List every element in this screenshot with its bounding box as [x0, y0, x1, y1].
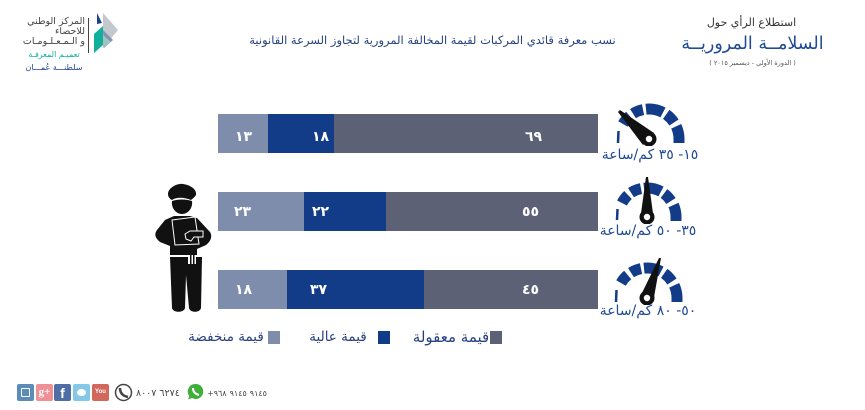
logo: و الـمـعـلـومـات: [23, 36, 85, 47]
logo: سلطنـــة عُمـــان: [26, 63, 82, 72]
segment low 23: ٢٣: [234, 204, 251, 220]
phone number: ٦٢٧٤: [159, 388, 180, 399]
segment high 37: ٣٧: [310, 282, 327, 298]
segment low 18: ١٨: [235, 282, 252, 298]
icon: youtube: [92, 384, 109, 401]
whatsapp number: ٩١٤٥: [230, 389, 247, 398]
subtitle: نسب معرفة قائدي المركبات لقيمة المخالفة المرورية لتجاوز السرعة القانونية: [249, 33, 616, 47]
segment reasonable 55: [386, 192, 598, 231]
icon: facebook: [54, 384, 71, 401]
whatsapp number: [207, 389, 267, 398]
legend swatch: reasonable: [490, 331, 502, 344]
segment low 23: [218, 192, 304, 231]
phone number: ٨٠٠٧: [136, 388, 156, 399]
legend text: low: قيمة منخفضة: [188, 329, 264, 345]
logo: [23, 13, 118, 72]
legend text: reasonable: قيمة معقولة: [413, 328, 489, 346]
title block: [681, 15, 824, 67]
legend swatch: high: [378, 331, 390, 344]
segment low 13: [218, 114, 268, 153]
phone number: [136, 388, 180, 399]
whatsapp number: ٩١٤٥: [250, 389, 267, 398]
whatsapp number: +٩٦٨: [207, 389, 227, 398]
social bar: [17, 384, 267, 402]
segment high 22: [304, 192, 386, 231]
segment reasonable 45: [424, 270, 598, 309]
segment reasonable 69: ٦٩: [525, 129, 542, 145]
legend text: high: قيمة عالية: [309, 329, 367, 345]
gauge 1: [616, 104, 684, 146]
segment high 18: ١٨: [312, 129, 329, 145]
segment reasonable 45: ٤٥: [522, 282, 539, 298]
logo: تعميـم المعرفـة: [28, 50, 80, 59]
bar row 1: [218, 114, 598, 153]
icon: phone: [114, 384, 132, 402]
gauge 2 label: ٣٥- ٥٠ كم/ساعة: [600, 223, 696, 239]
segment reasonable 69: [334, 114, 598, 153]
segment reasonable 55: ٥٥: [522, 204, 539, 220]
legend swatch: low: [268, 331, 280, 344]
icon: google plus: g+: [39, 386, 50, 398]
segment high 37: [287, 270, 424, 309]
heading: traffic safety: السلامــة المروريــة: [681, 34, 824, 54]
logo: للاحصاء: [55, 26, 85, 37]
segment high 22: ٢٢: [312, 204, 329, 220]
icon: facebook: f: [60, 385, 65, 401]
logo: المركز الوطني: [27, 16, 85, 27]
icon: twitter: [73, 384, 90, 401]
gauge 3 label: ٥٠- ٨٠ كم/ساعة: [600, 303, 696, 319]
bar row 3: [218, 270, 598, 309]
gauge 3: [614, 258, 682, 305]
icon: whatsapp: [188, 384, 204, 400]
edition note: ( الدورة الأولى - ديسمبر ٢٠١٥ ): [709, 59, 796, 67]
icon: youtube: You: [95, 389, 106, 395]
gauge 1 label: ١٥- ٣٥ كم/ساعة: [602, 147, 698, 163]
segment low 18: [218, 270, 287, 309]
segment high 18: [268, 114, 334, 153]
gauge 2: [616, 177, 682, 224]
legend: [188, 328, 502, 346]
icon: policeman: [155, 184, 212, 312]
icon: instagram: [17, 384, 34, 401]
heading: survey: استطلاع الرأي حول: [707, 16, 796, 29]
segment low 13: ١٣: [235, 129, 252, 145]
bar row 2: [218, 192, 598, 231]
icon: google plus: [36, 384, 53, 401]
